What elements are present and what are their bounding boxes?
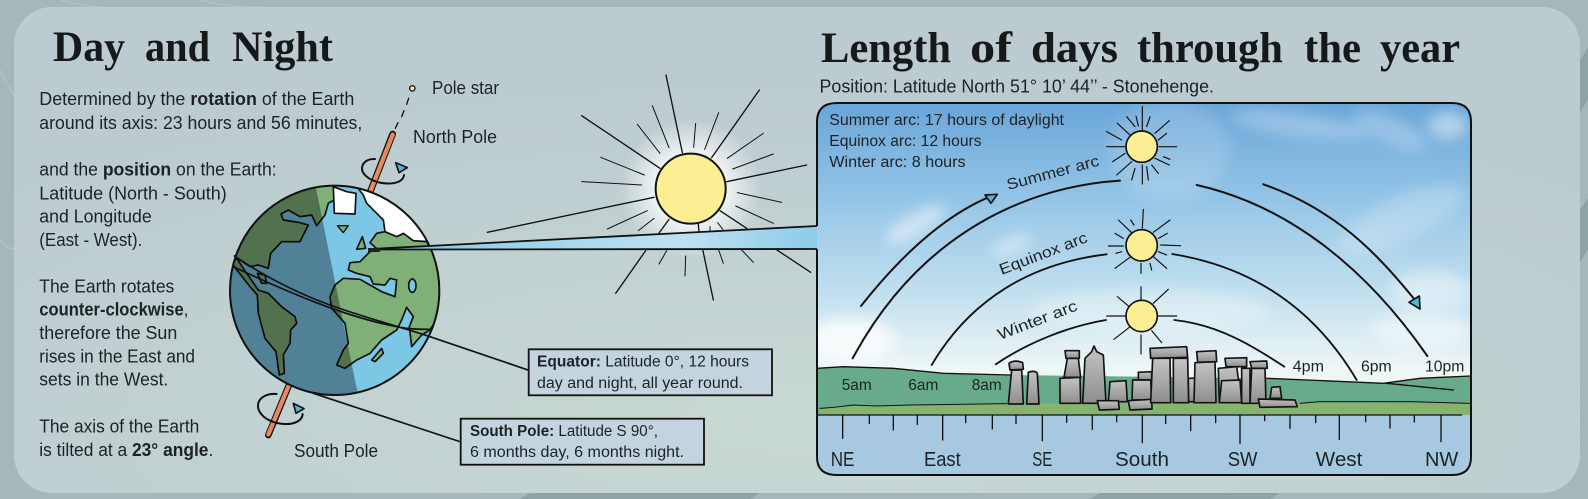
callout: south pole: 6 months day, 6 months night. [470,444,684,461]
sun: summer [1107,107,1177,184]
ground [817,367,1471,415]
panel: sky diagram [805,100,1473,475]
text block: axis tilt [39,417,213,460]
sun: winter [1107,287,1177,354]
night side shading [231,188,358,394]
arrow: north rotation [362,159,407,184]
stonehenge [1008,346,1297,410]
callout: equator: Equator: Latitude 0°, 12 hours [537,354,749,371]
text block: rotation: around its axis: 23 hours and 56 minutes, [39,113,362,133]
compass labels: NE [831,449,854,471]
sun with rays [487,75,811,300]
sun: equinox [1108,209,1181,273]
arc labels: Summer arc [1005,153,1101,194]
title: Day and Night: and [145,24,210,71]
callout: equator [529,349,772,395]
compass labels: NW [1425,449,1458,471]
title: Day and Night: Day [53,24,125,71]
icon: pole star [395,86,415,128]
legend: arc hours: Summer arc: 17 hours of daylight [829,112,1065,129]
time labels: 8am [972,377,1002,394]
arrow: sun path rising [861,194,997,306]
time labels [842,359,1464,394]
text block: position: and the position on the Earth: [39,160,277,180]
time labels: 6am [908,377,938,394]
title: Length of days through the year: through [1137,25,1283,72]
text block: position: (East - West). [39,230,142,250]
arrow: sun path setting [1263,184,1420,309]
winter arc [996,320,1284,367]
arrow: south rotation [258,394,304,424]
compass labels: SW [1228,449,1258,471]
callout: equator: day and night, all year round. [537,375,743,392]
time labels: 5am [842,377,872,394]
title: Length of days through the year: Length [821,25,951,72]
horizon compass strip [817,415,1471,475]
text block: position [39,160,277,250]
panel: day and night text [39,24,362,460]
text block: counter-clockwise rotation: sets in the West. [39,370,168,390]
title: Length of days through the year [821,25,1460,72]
text block: counter-clockwise rotation: therefore the Sun [39,323,177,343]
time labels: 10pm [1425,359,1464,376]
arc labels [995,153,1101,344]
earth diagram [229,85,528,442]
callout: south pole [461,419,704,465]
compass labels: East [924,449,961,471]
text block: position: Latitude (North - South) [39,183,227,203]
text block: axis tilt: is tilted at a 23° angle. [39,440,213,460]
text block: counter-clockwise rotation [39,276,195,390]
title: Length of days through the year: the [1304,25,1361,72]
text block: counter-clockwise rotation: rises in the East and [39,346,195,366]
time labels: 4pm [1293,359,1324,376]
compass labels: West [1316,449,1363,471]
compass labels: SE [1032,449,1052,471]
leader line: south pole [313,393,461,442]
compass labels [831,449,1458,471]
text block: rotation: Determined by the rotation of the Earth [39,89,354,109]
summer arc [853,181,1427,358]
legend: arc hours: Equinox arc: 12 hours [829,133,982,150]
arc labels: Equinox arc [997,229,1090,279]
south axis [268,385,289,435]
label: Pole star: Pole star [432,78,499,98]
callout: south pole: South Pole: Latitude S 90°, [470,423,658,440]
title: Day and Night [53,24,334,71]
title: Length of days through the year: days [1031,25,1118,72]
arc labels: Winter arc [995,298,1080,344]
legend: arc hours [829,112,1065,171]
sunlight beam [368,226,817,252]
text block: position: and Longitude [39,207,152,227]
text block: counter-clockwise rotation: counter-clockwise, [39,300,188,320]
title: Day and Night: Night [232,24,334,71]
time labels: 6pm [1361,359,1392,376]
label: South Pole: South Pole [294,441,378,461]
label: North Pole: North Pole [413,127,497,147]
icon: globe [229,184,440,396]
text block: axis tilt: The axis of the Earth [39,417,199,437]
compass labels: South [1115,449,1169,471]
clouds [805,100,1473,362]
leader line: equator [234,256,562,382]
title: Length of days through the year: of [970,25,1013,72]
legend: arc hours: Winter arc: 8 hours [829,154,966,171]
text block: rotation [39,89,362,133]
text block: counter-clockwise rotation: The Earth rotates [39,276,174,296]
equinox arc [932,254,1357,380]
north axis [370,134,393,192]
title: Length of days through the year: year [1380,25,1460,72]
panel border [817,103,1471,475]
subtitle: position: Position: Latitude North 51° 10’ 44’’ - Stonehenge. [820,77,1214,97]
